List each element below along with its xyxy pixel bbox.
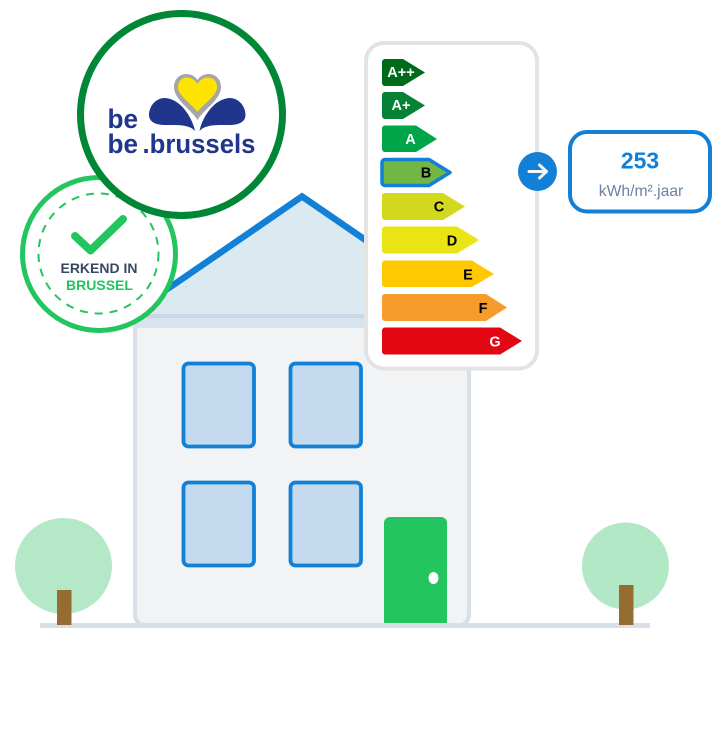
bar: C [382, 193, 465, 220]
house [133, 196, 471, 625]
icon: heart [174, 74, 221, 120]
bar: F: F [479, 301, 488, 317]
panel: energy label scale [366, 43, 537, 368]
icon: arrow circle [518, 152, 557, 191]
logo text: be [108, 104, 138, 134]
badge text [60, 260, 138, 293]
callout: energy value: 253 [621, 148, 659, 174]
roof [139, 196, 465, 314]
house body [135, 326, 469, 625]
badge: erkend in Brussel [22, 178, 176, 330]
logo text: be [108, 129, 138, 159]
ground line [40, 623, 650, 628]
bar: D [382, 226, 479, 254]
icon: left drop [149, 98, 195, 131]
icon: right drop [200, 98, 246, 131]
badge text: ERKEND IN [60, 260, 138, 276]
window: lower right [290, 482, 361, 566]
bar: B (selected): B [421, 166, 431, 182]
badge: be.brussels logo [80, 14, 282, 216]
tree: right [582, 522, 669, 625]
bar: A: A [405, 132, 416, 148]
roof band [133, 314, 471, 328]
bar: G [382, 328, 522, 354]
callout: energy value [570, 132, 710, 212]
logo text: .brussels [142, 129, 256, 159]
bar: E: E [463, 268, 473, 284]
window: upper right [290, 364, 361, 446]
bar: F [382, 294, 507, 321]
window: lower left [184, 482, 254, 566]
bar: G: G [489, 334, 501, 350]
energy bars [382, 59, 522, 354]
bar: A++ [382, 59, 425, 86]
bar: D: D [447, 234, 457, 250]
bar: A+: A+ [392, 98, 410, 114]
bar: A+ [382, 92, 425, 119]
bar: A [382, 126, 437, 152]
tree: left [15, 518, 112, 625]
door [384, 517, 447, 623]
window: upper left [184, 364, 254, 446]
logo text [108, 104, 256, 159]
callout: energy value: kWh/m².jaar [599, 183, 683, 200]
bar: A++: A++ [387, 65, 415, 81]
badge text: BRUSSEL [66, 277, 133, 293]
bar: C: C [434, 200, 445, 216]
bar: E [382, 260, 494, 287]
icon: check mark [75, 219, 123, 250]
bar: B (selected) [382, 160, 450, 186]
